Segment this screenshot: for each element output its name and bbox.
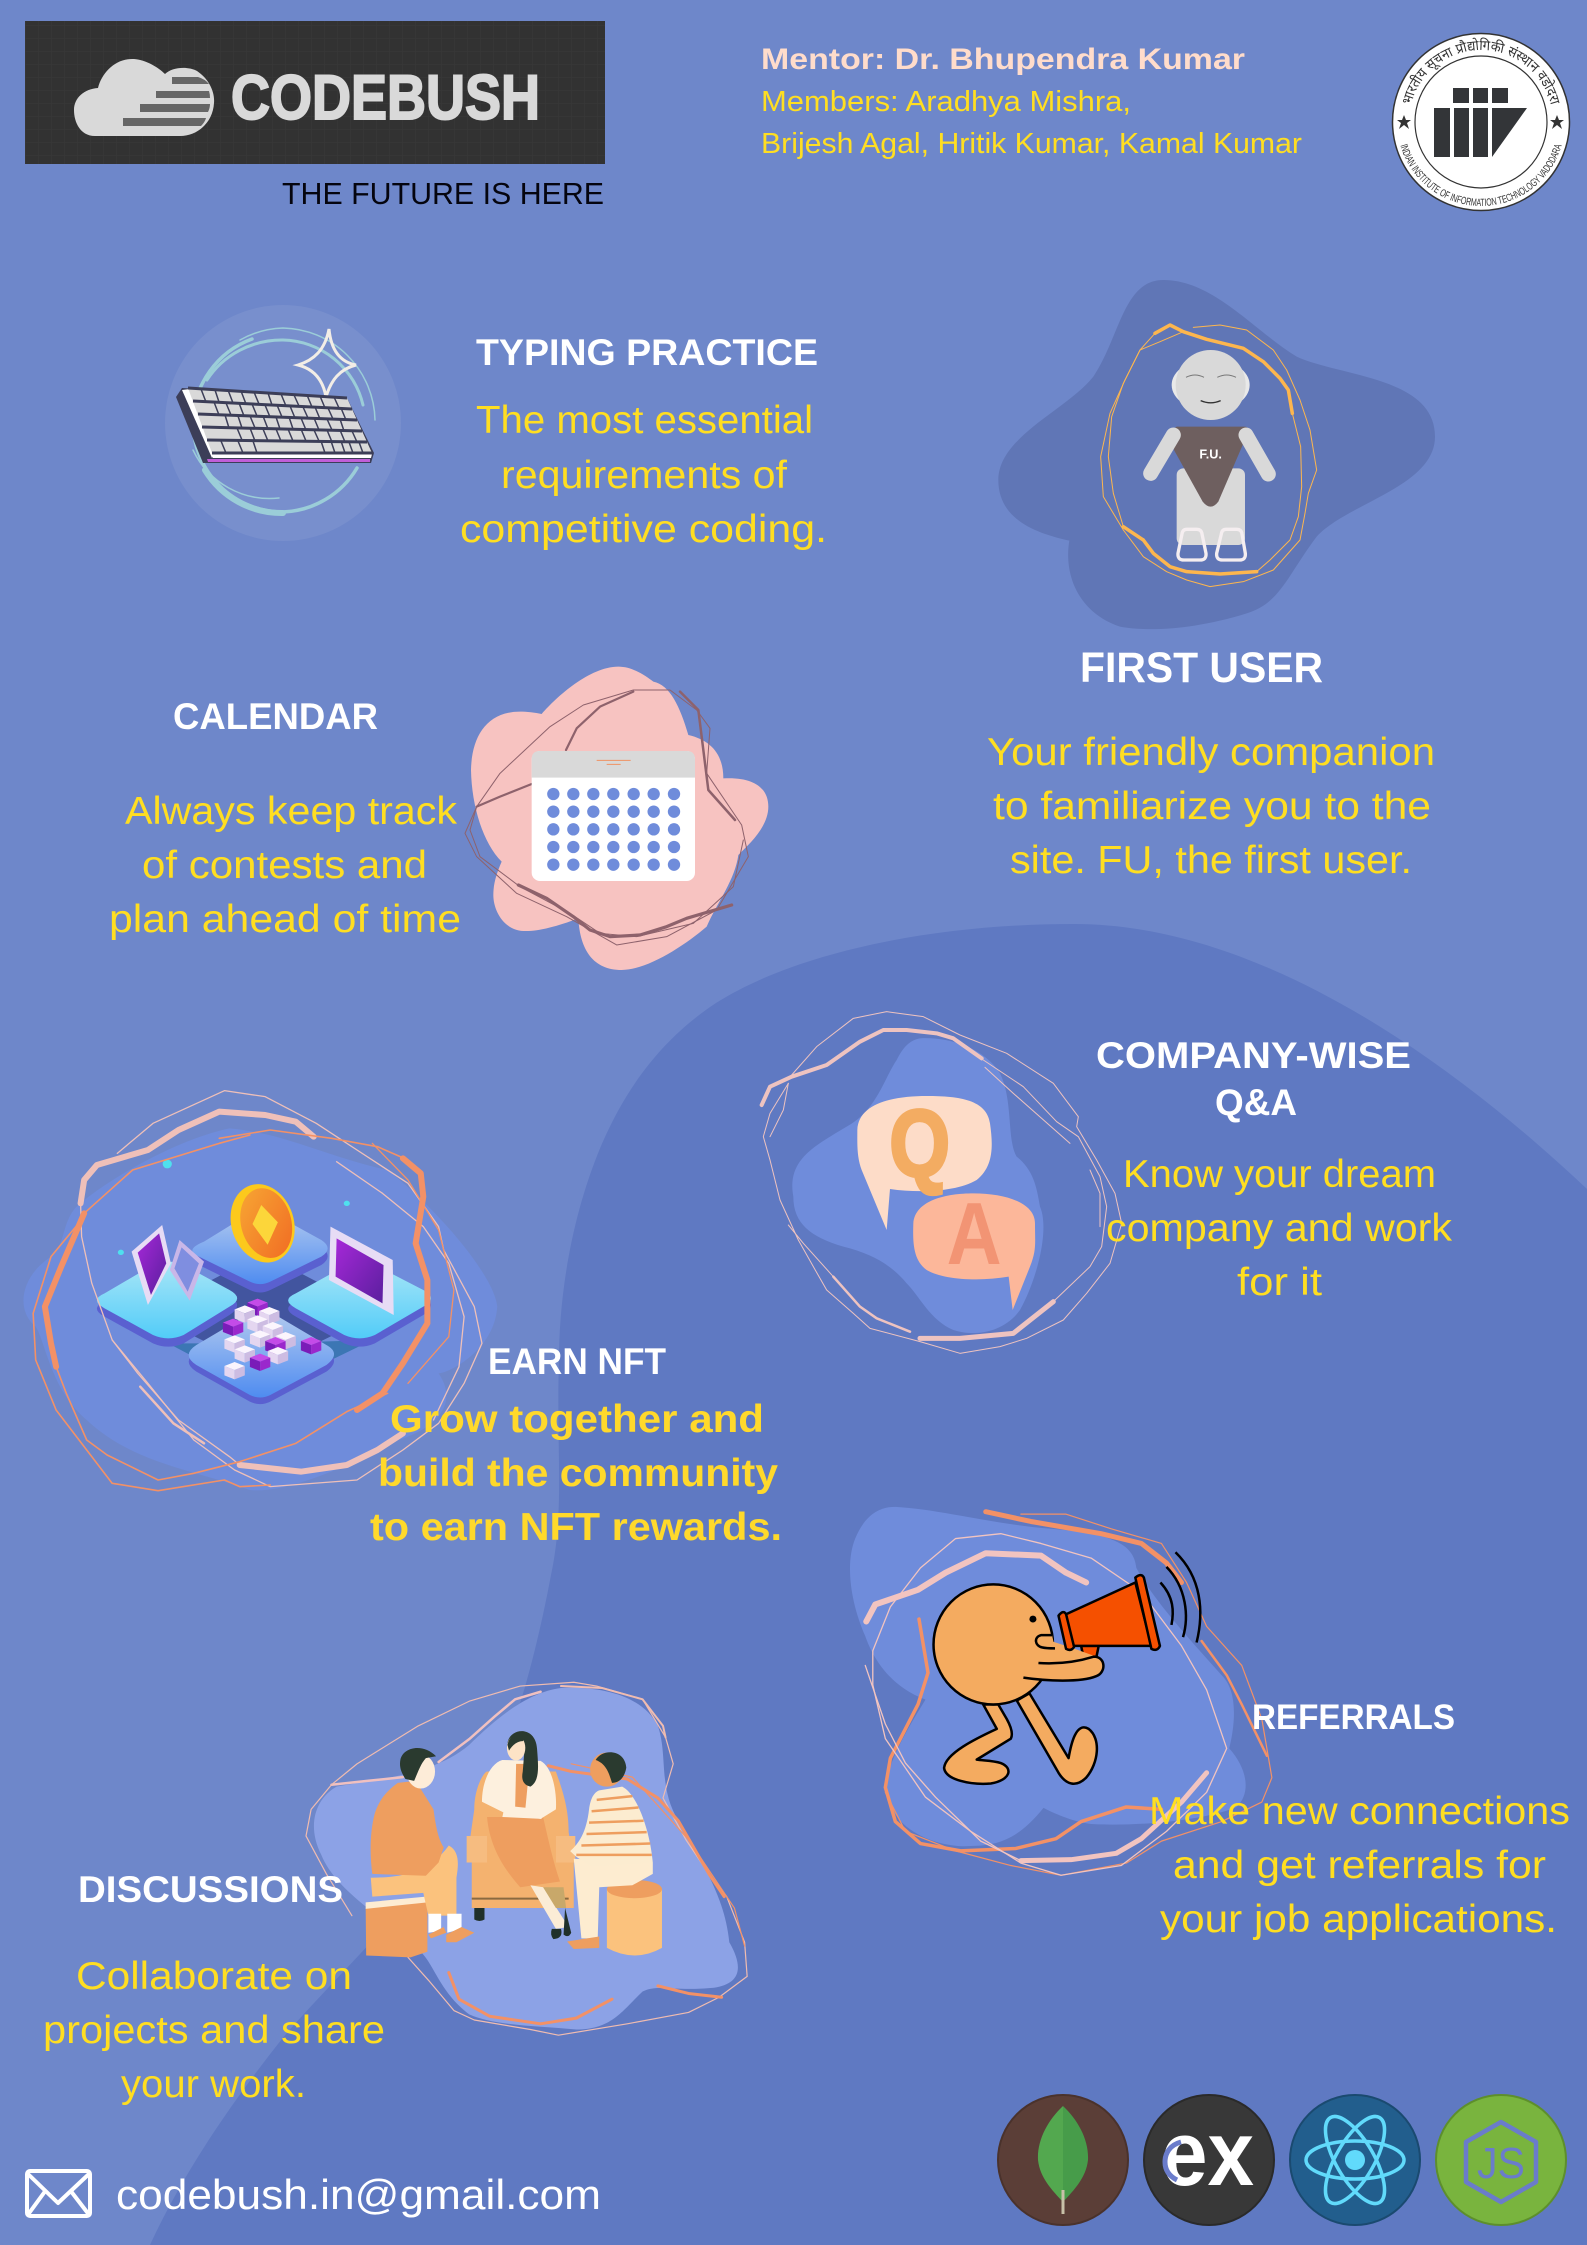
icon: Node.js bbox=[1436, 2095, 1566, 2225]
icon: NFT frames left bbox=[132, 1225, 204, 1305]
text: first user: Your friendly companion bbox=[987, 731, 1435, 774]
panel: calendar illustration bbox=[465, 667, 768, 970]
icon: ethereum coin bbox=[225, 1182, 300, 1265]
heading: earn NFT: EARN NFT bbox=[488, 1341, 666, 1382]
text: discussions: Collaborate on bbox=[76, 1955, 352, 1998]
logo wordmark: CODEBUSH bbox=[231, 63, 540, 133]
decorative swirl ring bbox=[762, 1012, 1122, 1353]
text: company-wise Q&A: Know your dream bbox=[1123, 1153, 1436, 1196]
icon: robot: F.U. bbox=[1199, 448, 1222, 462]
text: earn NFT: to earn NFT rewards. bbox=[370, 1506, 782, 1549]
panel: earn NFT illustration bbox=[23, 1091, 497, 1491]
icon: mail envelope bbox=[27, 2171, 90, 2216]
icon: NFT platform tiles bbox=[97, 1210, 431, 1404]
icon: answer bubble bbox=[913, 1184, 1035, 1310]
icon: Express bbox=[1144, 2095, 1274, 2225]
tagline: THE FUTURE IS HERE bbox=[282, 176, 604, 211]
heading: referrals: REFERRALS bbox=[1252, 1698, 1455, 1737]
figure: woman on armchair bbox=[467, 1731, 575, 1939]
icon: institute seal: INDIAN INSTITUTE OF INFORMATION TECHNOLOGY VADODARA bbox=[1400, 144, 1562, 206]
text: discussions bbox=[43, 1955, 385, 2106]
text: earn NFT: build the community bbox=[378, 1452, 778, 1495]
team credits: Brijesh Agal, Hritik Kumar, Kamal Kumar bbox=[761, 128, 1302, 160]
heading: typing practice: TYPING PRACTICE bbox=[476, 332, 818, 373]
heading: company-wise Q&A bbox=[1096, 1035, 1411, 1123]
team credits: Mentor: Dr. Bhupendra Kumar bbox=[761, 43, 1245, 76]
icon: question bubble bbox=[857, 1091, 992, 1230]
heading: first user: FIRST USER bbox=[1080, 644, 1323, 692]
text: company-wise Q&A bbox=[1106, 1153, 1453, 1304]
figure: right man on stool bbox=[567, 1752, 662, 1955]
icon: NFT cubes bbox=[223, 1299, 321, 1379]
header: logo banner bbox=[25, 21, 605, 164]
text: calendar: Always keep track bbox=[125, 790, 458, 833]
text: referrals bbox=[1149, 1790, 1570, 1941]
icon: institute seal bbox=[1392, 32, 1570, 212]
icon: sparkle bbox=[298, 329, 356, 397]
icon: Express: ex bbox=[1161, 2103, 1254, 2205]
panel: typing practice illustration bbox=[165, 305, 401, 541]
text: typing practice: The most essential bbox=[476, 399, 813, 442]
icon: React bbox=[1290, 2095, 1420, 2225]
text: company-wise Q&A: for it bbox=[1237, 1261, 1322, 1304]
decorative swirl ring bbox=[865, 1512, 1272, 1875]
heading: company-wise Q&A: COMPANY-WISE bbox=[1096, 1035, 1411, 1076]
figure: left man on stool bbox=[366, 1748, 474, 1957]
panel: discussions illustration bbox=[306, 1682, 747, 2035]
background shape: darker curved region bbox=[150, 924, 1587, 2245]
text: referrals: your job applications. bbox=[1160, 1898, 1557, 1941]
icon: NFT frame right bbox=[329, 1227, 394, 1315]
icon: calendar bbox=[532, 751, 695, 881]
team credits bbox=[761, 43, 1302, 160]
text: discussions: projects and share bbox=[43, 2009, 385, 2052]
decorative swirl ring bbox=[306, 1682, 747, 2035]
text: calendar bbox=[109, 790, 461, 941]
text: calendar: plan ahead of time bbox=[109, 898, 461, 941]
icon: question bubble: Q bbox=[889, 1091, 950, 1197]
icon: character with megaphone bbox=[934, 1552, 1200, 1784]
text: earn NFT bbox=[370, 1398, 782, 1549]
decorative swirl ring bbox=[33, 1091, 482, 1491]
icon: Node.js: JS bbox=[1477, 2139, 1525, 2188]
panel: company Q&A illustration bbox=[762, 1012, 1122, 1353]
decorative swirl ring bbox=[1101, 325, 1317, 587]
text: first user: to familiarize you to the bbox=[993, 785, 1431, 828]
decorative swirl ring bbox=[465, 690, 748, 945]
heading: company-wise Q&A: Q&A bbox=[1215, 1082, 1297, 1123]
panel: first user robot illustration bbox=[998, 280, 1435, 629]
text: earn NFT: Grow together and bbox=[390, 1398, 764, 1441]
icon: answer bubble: A bbox=[947, 1184, 1002, 1283]
icon: keyboard bbox=[176, 388, 374, 463]
heading: discussions: DISCUSSIONS bbox=[78, 1869, 343, 1910]
text: referrals: and get referrals for bbox=[1173, 1844, 1546, 1887]
icon: MongoDB bbox=[998, 2095, 1128, 2225]
text: typing practice: requirements of bbox=[501, 454, 787, 497]
team credits: Members: Aradhya Mishra, bbox=[761, 86, 1131, 118]
contact email: codebush.in@gmail.com bbox=[116, 2171, 601, 2218]
heading: calendar: CALENDAR bbox=[173, 696, 378, 737]
panel: referrals illustration bbox=[850, 1507, 1272, 1875]
text: calendar: of contests and bbox=[142, 844, 427, 887]
icon: three people in discussion bbox=[366, 1731, 662, 1957]
text: referrals: Make new connections bbox=[1149, 1790, 1570, 1833]
cyan sparkle dots bbox=[118, 1160, 350, 1255]
text: typing practice: competitive coding. bbox=[460, 508, 827, 551]
icon: cloud logo bbox=[74, 59, 214, 136]
text: company-wise Q&A: company and work bbox=[1106, 1207, 1453, 1250]
text: discussions: your work. bbox=[121, 2063, 306, 2106]
text: first user: site. FU, the first user. bbox=[1010, 839, 1412, 882]
icon: robot bbox=[1151, 350, 1268, 560]
icon: institute seal: भारतीय सूचना प्रौद्योगिकी संस्थान वडोदरा bbox=[1403, 38, 1560, 104]
text: first user bbox=[987, 731, 1435, 882]
text: typing practice bbox=[460, 399, 827, 551]
